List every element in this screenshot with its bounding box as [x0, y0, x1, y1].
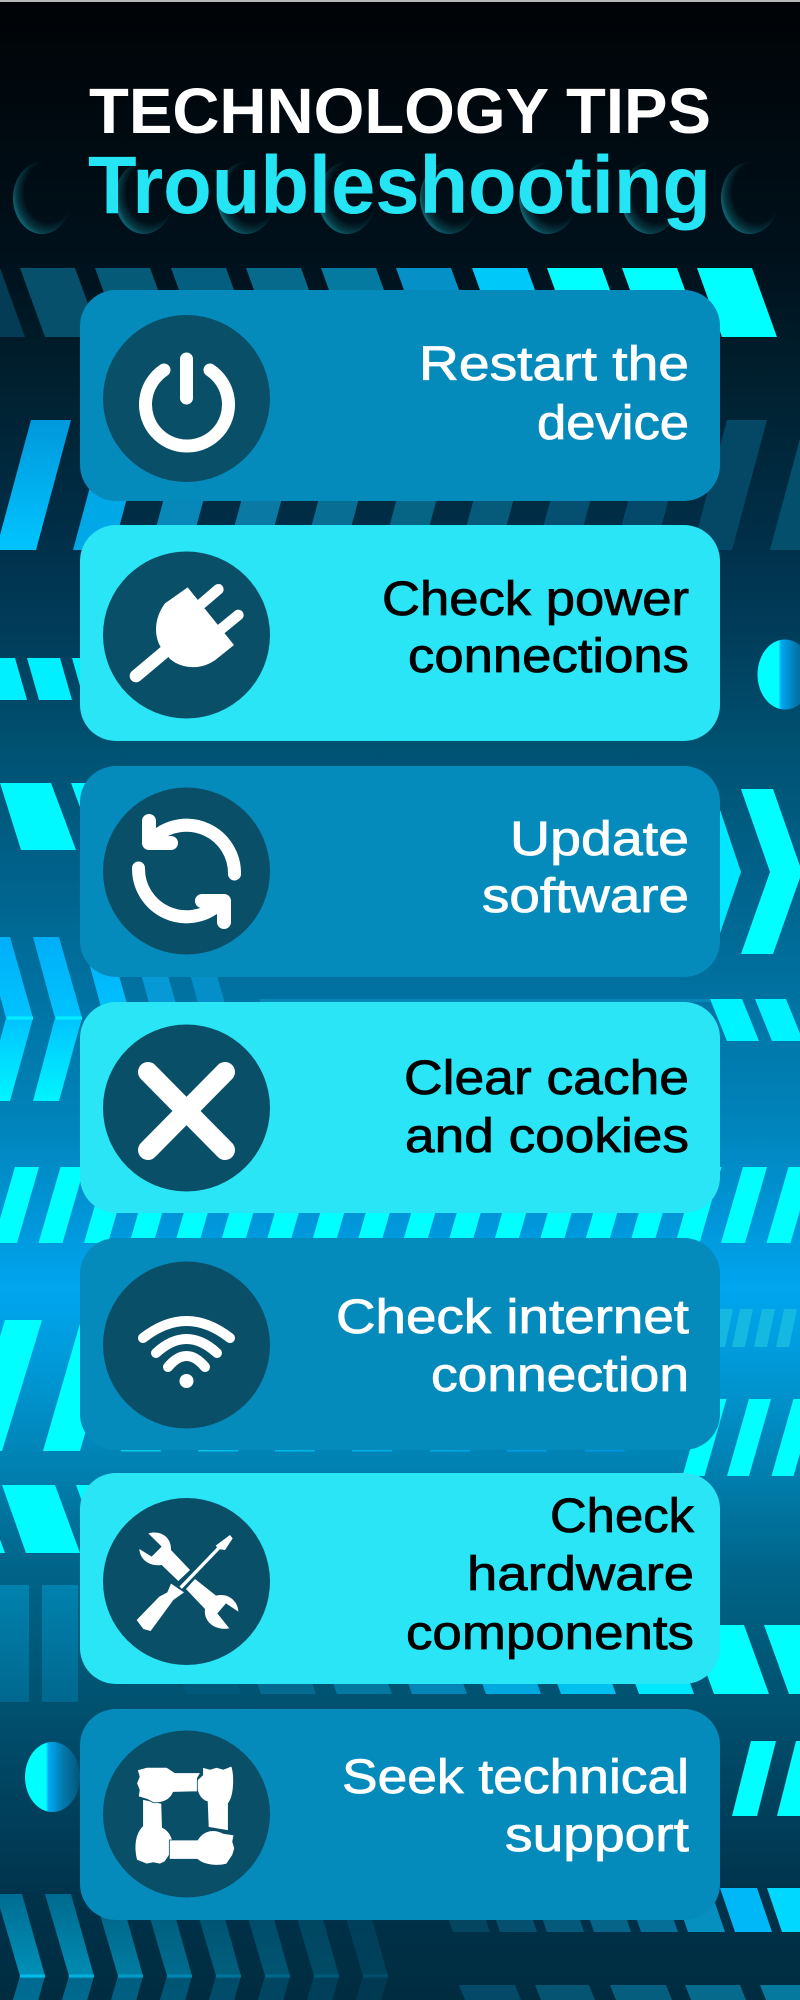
title	[88, 75, 711, 231]
background stripes: band below sixth card	[161, 1625, 800, 1694]
panel: restart the device	[80, 290, 720, 501]
vertical bars: left of sixth card	[0, 1585, 78, 1702]
text: check power connections	[382, 573, 689, 683]
text: restart the device: device	[537, 397, 689, 450]
icon circle: refresh	[103, 788, 270, 954]
chevrons: right of third card	[681, 789, 800, 954]
text: seek technical support: support	[505, 1809, 689, 1862]
row of crescent shapes behind the title	[13, 162, 779, 234]
text: check hardware components	[406, 1490, 695, 1660]
text: restart the device	[419, 338, 689, 450]
background stripes: left band near third card	[0, 783, 152, 850]
text: check internet connection: Check internet	[336, 1291, 689, 1344]
text: check hardware components: components	[406, 1607, 694, 1660]
top edge line	[0, 0, 800, 2]
background stripes: cyan band below fourth card	[0, 1167, 800, 1243]
background stripes: left band near second card	[0, 658, 117, 700]
icon circle: power	[103, 315, 270, 482]
panel: clear cache and cookies	[80, 1002, 720, 1213]
background stripes: band below title	[0, 268, 777, 337]
text: seek technical support: Seek technical	[342, 1751, 689, 1804]
background stripes: left band beside sixth card	[0, 1485, 156, 1553]
text: seek technical support	[342, 1751, 689, 1862]
title line: troubleshooting: Troubleshooting	[88, 140, 711, 231]
text: check internet connection: connection	[431, 1349, 689, 1402]
icon circle: x mark	[103, 1024, 270, 1192]
background stripes: faint band right of fifth card	[712, 1309, 797, 1347]
panel: check hardware components	[80, 1473, 720, 1684]
text: check hardware components: hardware	[467, 1548, 694, 1601]
title line: technology tips: TECHNOLOGY TIPS	[89, 75, 711, 147]
text: restart the device: Restart the	[419, 338, 689, 391]
panel: check internet connection	[80, 1238, 720, 1450]
text: check internet connection	[336, 1291, 689, 1402]
text: check power connections: Check power	[382, 573, 689, 626]
background stripes: right of seventh card	[732, 1741, 800, 1816]
background stripes: slanted band beside first card	[0, 420, 800, 550]
text: check hardware components: Check	[550, 1490, 695, 1543]
chevrons: left of fourth card	[0, 937, 229, 1101]
oval: left of seventh card	[25, 1742, 80, 1812]
icon circle: joined hands	[103, 1730, 270, 1898]
text: update software: Update	[510, 813, 689, 866]
chevrons: bottom left	[0, 1894, 388, 2000]
panel: check power connections	[80, 525, 720, 741]
background stripes: right band near fifth card	[682, 1399, 800, 1476]
dashes below fifth card	[121, 1448, 625, 1452]
icon circle: wifi	[103, 1262, 270, 1428]
background stripes: left band beside fifth card	[0, 1320, 118, 1451]
text: update software: software	[482, 870, 689, 923]
text: clear cache and cookies	[404, 1052, 689, 1163]
panel: update software	[80, 766, 720, 977]
icon circle: plug	[103, 552, 270, 718]
icon circle: wrench and screwdriver	[103, 1498, 270, 1665]
panel: seek technical support	[80, 1709, 720, 1920]
background stripes: band below seventh card	[438, 1888, 800, 1932]
text: clear cache and cookies: Clear cache	[404, 1052, 689, 1105]
text: clear cache and cookies: and cookies	[405, 1110, 689, 1163]
text: update software	[482, 813, 689, 923]
background stripes: top right of fourth card	[260, 999, 800, 1041]
oval: right side	[758, 640, 800, 710]
text: check power connections: connections	[408, 630, 689, 683]
background stripes: bottom right	[459, 1985, 800, 2000]
